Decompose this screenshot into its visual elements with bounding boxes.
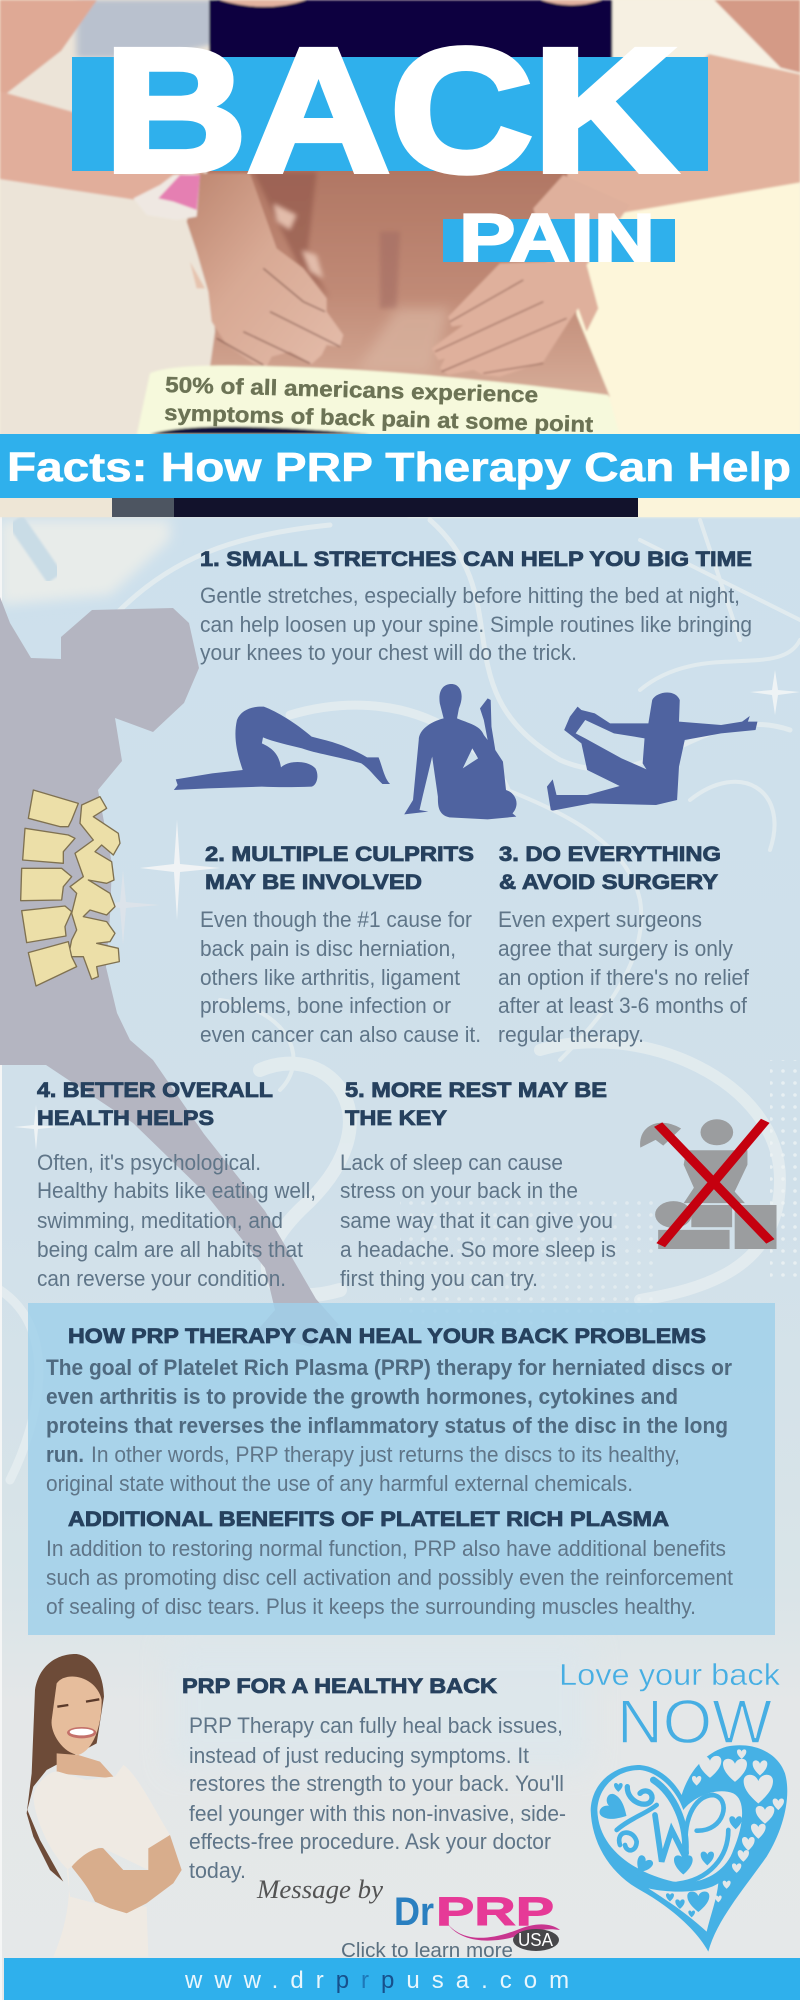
panel: how PRP therapy heals bbox=[28, 1303, 775, 1635]
panel paragraph: how PRP heals: proteins that reverses the inflammatory status of the disc in the long bbox=[46, 1413, 728, 1438]
love your back slogan: NOW bbox=[617, 1688, 772, 1757]
fact 3 text: after at least 3-6 months of bbox=[498, 993, 748, 1018]
panel paragraph: how PRP heals: original state without the use of any harmful external chemicals. bbox=[46, 1471, 633, 1496]
PAIN banner bbox=[443, 200, 675, 276]
hero photo: woman holding lower back bbox=[0, 0, 800, 517]
left hand bbox=[187, 173, 343, 367]
fact 2 heading: 2. MULTIPLE CULPRITS bbox=[205, 843, 474, 866]
fact 3 text: an option if there's no relief bbox=[498, 965, 750, 990]
panel heading: additional benefits: ADDITIONAL BENEFITS OF PLATELET RICH PLASMA bbox=[68, 1508, 669, 1531]
love your back slogan: Love your back bbox=[559, 1657, 781, 1692]
icon: yoga stretches silhouettes bbox=[174, 684, 757, 819]
silhouette of running figure bbox=[0, 597, 339, 1347]
fact 3 heading: 3. DO EVERYTHING bbox=[499, 843, 721, 866]
closing text: effects-free procedure. Ask your doctor bbox=[189, 1829, 551, 1854]
panel paragraph: additional benefits bbox=[46, 1536, 733, 1619]
panel paragraph: how PRP heals bbox=[46, 1355, 732, 1496]
statistic text: symptoms of back pain at some point bbox=[164, 400, 594, 437]
logo: Dr PRP USA: USA bbox=[518, 1930, 553, 1950]
background swirl pattern bbox=[0, 520, 800, 1480]
BACK banner bbox=[72, 13, 708, 209]
icon: seated leg hold pose bbox=[547, 692, 757, 811]
icon: crossed-out bed rest bbox=[640, 1119, 777, 1249]
fact 5 heading bbox=[345, 1079, 607, 1130]
website footer band bbox=[4, 1958, 800, 2000]
fact 3 text: Even expert surgeons bbox=[498, 907, 702, 932]
fact 1 heading: 1. SMALL STRETCHES CAN HELP YOU BIG TIME bbox=[200, 548, 752, 571]
love your back slogan bbox=[559, 1657, 781, 1757]
watch bbox=[133, 173, 200, 220]
statistic text: 50% of all americans experience bbox=[165, 372, 538, 407]
fact 3 text bbox=[498, 907, 750, 1047]
logo: Dr PRP USA: Dr bbox=[394, 1890, 434, 1934]
fact 2 heading bbox=[205, 843, 474, 894]
icon: spine vertebrae bbox=[21, 790, 120, 986]
fact 2 heading: MAY BE INVOLVED bbox=[205, 871, 422, 894]
closing text: restores the strength to your back. You'll bbox=[189, 1771, 564, 1796]
fact 4 heading: HEALTH HELPS bbox=[37, 1107, 214, 1130]
closing text: today. bbox=[189, 1858, 246, 1883]
fact 2 text: even cancer can also cause it. bbox=[200, 1022, 481, 1047]
fact 5 text: Lack of sleep can cause bbox=[340, 1150, 563, 1175]
fact 4 text: swimming, meditation, and bbox=[37, 1208, 283, 1233]
panel paragraph: how PRP heals: In other words, PRP therapy just returns the discs to its healthy, bbox=[91, 1442, 680, 1467]
fact 4 text bbox=[37, 1150, 316, 1291]
panel paragraph: additional benefits: such as promoting disc cell activation and possibly even the reinforcement bbox=[46, 1565, 733, 1590]
facts heading text: Facts: How PRP Therapy Can Help bbox=[7, 444, 791, 490]
panel paragraph: additional benefits: In addition to restoring normal function, PRP also have additional benefits bbox=[46, 1536, 726, 1561]
panel paragraph: how PRP heals: The goal of Platelet Rich Plasma (PRP) therapy for herniated discs or bbox=[46, 1355, 732, 1380]
logo: Dr PRP USA: PRP bbox=[436, 1890, 554, 1934]
waistband bbox=[137, 366, 620, 435]
fact 3 text: regular therapy. bbox=[498, 1022, 644, 1047]
fact 1 text: your knees to your chest will do the trick. bbox=[200, 640, 577, 665]
panel paragraph: how PRP heals: even arthritis is to provide the growth hormones, cytokines and bbox=[46, 1384, 678, 1409]
BACK title: BACK bbox=[104, 13, 676, 209]
logo: Dr PRP USA bbox=[394, 1890, 560, 1951]
closing text: feel younger with this non-invasive, side- bbox=[189, 1801, 566, 1826]
fact 2 text: back pain is disc herniation, bbox=[200, 936, 456, 961]
fact 2 text: problems, bone infection or bbox=[200, 993, 451, 1018]
fact 5 text: same way that it can give you bbox=[340, 1208, 613, 1233]
fact 5 text: first thing you can try. bbox=[340, 1266, 538, 1291]
fact 2 text: Even though the #1 cause for bbox=[200, 907, 472, 932]
icon: seated twist pose bbox=[404, 684, 517, 819]
fact 1 text: can help loosen up your spine. Simple routines like bringing bbox=[200, 612, 752, 637]
fact 3 text: agree that surgery is only bbox=[498, 936, 733, 961]
fact 4 heading: 4. BETTER OVERALL bbox=[37, 1079, 273, 1102]
icon: plow pose bbox=[174, 707, 390, 790]
fact 2 text bbox=[200, 907, 481, 1047]
PAIN title: PAIN bbox=[459, 200, 655, 276]
fact 5 text: stress on your back in the bbox=[340, 1178, 578, 1203]
photo: smiling woman with crossed arms bbox=[27, 1654, 182, 1957]
fact 5 text: a headache. So more sleep is bbox=[340, 1237, 616, 1262]
panel paragraph: how PRP heals: run. bbox=[46, 1442, 84, 1467]
fact 5 heading: THE KEY bbox=[345, 1107, 447, 1130]
fact 4 text: Healthy habits like eating well, bbox=[37, 1178, 316, 1203]
website url: www.drprpusa.com bbox=[184, 1967, 581, 1994]
fact 3 heading bbox=[499, 843, 721, 894]
page background bbox=[0, 517, 800, 2000]
fact 1 text: Gentle stretches, especially before hitting the bed at night, bbox=[200, 583, 740, 608]
fact 4 text: Often, it's psychological. bbox=[37, 1150, 261, 1175]
fact 5 heading: 5. MORE REST MAY BE bbox=[345, 1079, 607, 1102]
fact 4 text: being calm are all habits that bbox=[37, 1237, 303, 1262]
torso bbox=[207, 165, 610, 397]
statistic text bbox=[164, 372, 594, 437]
fact 4 heading bbox=[37, 1079, 273, 1130]
closing text bbox=[189, 1713, 566, 1883]
fact 4 text: can reverse your condition. bbox=[37, 1266, 286, 1291]
facts heading band bbox=[0, 434, 800, 517]
icon: decorative heart bbox=[591, 1745, 787, 1952]
fact 3 heading: & AVOID SURGERY bbox=[499, 871, 718, 894]
panel heading: how PRP heals: HOW PRP THERAPY CAN HEAL YOUR BACK PROBLEMS bbox=[68, 1325, 706, 1348]
click to learn more link: Click to learn more bbox=[341, 1940, 513, 1962]
fact 5 text bbox=[340, 1150, 616, 1291]
message by signature: Message by bbox=[256, 1875, 383, 1904]
closing text: instead of just reducing symptoms. It bbox=[189, 1743, 529, 1768]
fact 1 text bbox=[200, 583, 752, 665]
right hand bbox=[432, 175, 630, 377]
closing heading: PRP FOR A HEALTHY BACK bbox=[182, 1675, 497, 1698]
closing text: PRP Therapy can fully heal back issues, bbox=[189, 1713, 563, 1738]
fact 2 text: others like arthritis, ligament bbox=[200, 965, 460, 990]
panel paragraph: additional benefits: of sealing of disc tears. Plus it keeps the surrounding muscles healthy. bbox=[46, 1594, 696, 1619]
